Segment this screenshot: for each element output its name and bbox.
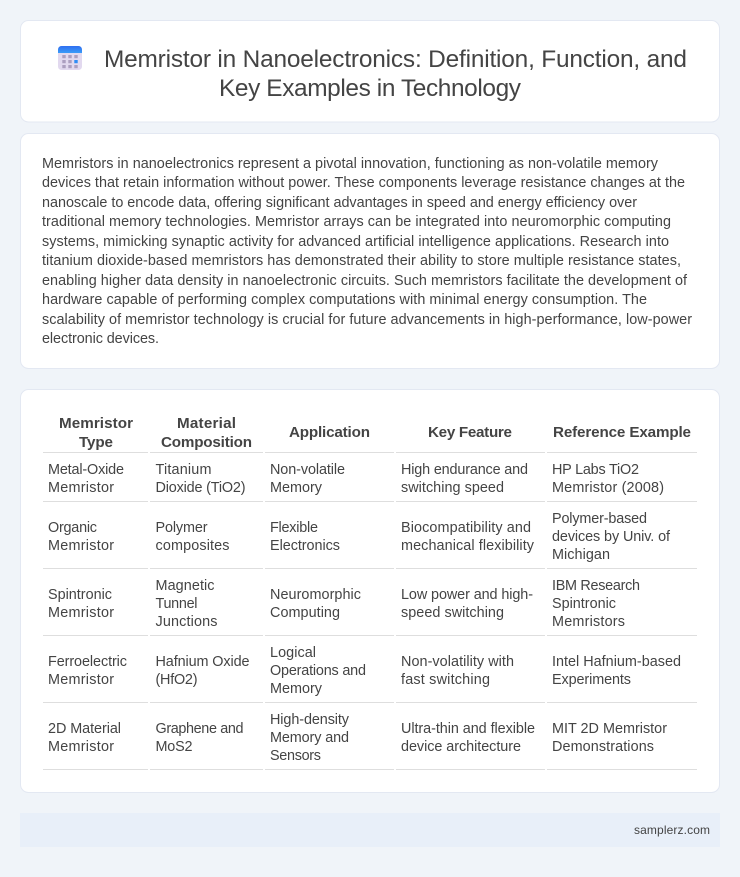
title — [104, 46, 687, 102]
table row: 2D material memristor: High-density — [270, 712, 350, 728]
table row: spintronic memristor: Spintronic — [552, 596, 616, 612]
table row: ferroelectric memristor — [43, 645, 697, 702]
table row: spintronic memristor — [43, 578, 697, 636]
table row: ferroelectric memristor: (HfO2) — [156, 672, 198, 688]
table row: 2D material memristor: Sensors — [270, 748, 321, 764]
table row: spintronic memristor: Computing — [270, 605, 340, 621]
table row: metal-oxide memristor — [43, 462, 697, 502]
table row: organic memristor: Memristor — [48, 538, 114, 554]
table row: metal-oxide memristor: Titanium — [156, 462, 212, 478]
table row: organic memristor: Biocompatibility and — [401, 520, 531, 536]
table row: spintronic memristor: speed switching — [401, 605, 504, 621]
panel: comparison table card — [20, 390, 720, 792]
table row: spintronic memristor: Memristors — [552, 614, 625, 630]
table row: spintronic memristor: Memristor — [48, 605, 114, 621]
table row: ferroelectric memristor: Memristor — [48, 672, 114, 688]
table row: 2D material memristor: Memory and — [270, 730, 349, 746]
table row: ferroelectric memristor: Experiments — [552, 672, 631, 688]
footer bar — [20, 813, 720, 847]
table row: metal-oxide memristor: Dioxide (TiO2) — [156, 480, 246, 496]
table row: organic memristor: devices by Univ. of — [552, 529, 671, 545]
icon: calendar grid — [58, 46, 82, 70]
table row: metal-oxide memristor: Memory — [270, 480, 323, 496]
table row: 2D material memristor: MoS2 — [156, 739, 192, 755]
table row: organic memristor: composites — [156, 538, 230, 554]
table header row — [43, 415, 697, 452]
table row: metal-oxide memristor: High endurance and — [401, 462, 528, 478]
table row: metal-oxide memristor: Memristor (2008) — [552, 480, 664, 496]
table row: ferroelectric memristor: Logical — [270, 645, 316, 661]
panel: description card — [20, 134, 720, 368]
text block: description paragraph: Memristors in nanoelectronics represent a pivotal innovation, functioning as non-volatile memory — [42, 156, 659, 172]
table row: 2D material memristor: device architecture — [401, 739, 521, 755]
table row: organic memristor: Polymer-based — [552, 511, 647, 527]
table header row: Composition — [161, 434, 252, 451]
table row: ferroelectric memristor: Operations and — [270, 663, 366, 679]
table row: organic memristor: Organic — [48, 520, 97, 536]
text block: description paragraph: titanium dioxide-based memristors has demonstrated their ability to store multiple resistance states, — [42, 253, 681, 269]
table row: organic memristor: mechanical flexibility — [401, 538, 535, 554]
text block: description paragraph: electronic devices. — [42, 331, 159, 347]
text block: description paragraph: scalability of memristor technology is crucial for future advancements in high-performance, low-power — [42, 312, 692, 328]
text block: description paragraph: hardware capable of performing complex computations with minimal energy consumption. The — [42, 292, 647, 308]
text block: description paragraph: enabling higher data density in nanoelectronic circuits. Such memristors facilitate the development of — [42, 273, 688, 289]
table row: spintronic memristor: IBM Research — [552, 578, 640, 594]
table row: 2D material memristor: Ultra-thin and flexible — [401, 721, 535, 737]
table row: metal-oxide memristor: Metal-Oxide — [48, 462, 124, 478]
table row: ferroelectric memristor: Hafnium Oxide — [156, 654, 250, 670]
table header row: Reference Example — [553, 424, 691, 441]
table header row: Material — [177, 415, 236, 432]
title: Memristor in Nanoelectronics: Definition, Function, and — [104, 46, 687, 73]
table row: 2D material memristor: Graphene and — [156, 721, 244, 737]
table row: 2D material memristor: 2D Material — [48, 721, 121, 737]
text block: description paragraph: nanoscale to encode data, offering significant advantages in speed and energy efficiency over — [42, 195, 637, 211]
table row: metal-oxide memristor: switching speed — [401, 480, 504, 496]
table row: spintronic memristor: Neuromorphic — [270, 587, 361, 603]
table row: spintronic memristor: Junctions — [156, 614, 218, 630]
table row: organic memristor — [43, 511, 697, 568]
table row: 2D material memristor: Memristor — [48, 739, 114, 755]
table row: organic memristor: Flexible — [270, 520, 318, 536]
table row: organic memristor: Polymer — [156, 520, 208, 536]
table row: 2D material memristor: Demonstrations — [552, 739, 654, 755]
text block: description paragraph: devices that retain information without power. These components leverage resistance changes at the — [42, 175, 685, 191]
table row: metal-oxide memristor: Memristor — [48, 480, 114, 496]
table header row: Application — [289, 424, 370, 441]
table row: ferroelectric memristor: Intel Hafnium-based — [552, 654, 681, 670]
table row: ferroelectric memristor: fast switching — [401, 672, 490, 688]
table row: spintronic memristor: Magnetic — [156, 578, 214, 594]
table row: ferroelectric memristor: Ferroelectric — [48, 654, 127, 670]
table row: spintronic memristor: Tunnel — [156, 596, 198, 612]
table row: organic memristor: Electronics — [270, 538, 340, 554]
text block: description paragraph — [42, 156, 692, 347]
table row: 2D material memristor: MIT 2D Memristor — [552, 721, 667, 737]
text block: description paragraph: traditional memory technologies. Memristor arrays can be integrated into neuromorphic computing — [42, 214, 671, 230]
table row: ferroelectric memristor: Memory — [270, 681, 323, 697]
table row: metal-oxide memristor: HP Labs TiO2 — [552, 462, 639, 478]
title: Key Examples in Technology — [219, 75, 522, 102]
text block: description paragraph: systems, mimicking synaptic activity for advanced artificial intelligence applications. Research into — [42, 234, 669, 250]
table row: metal-oxide memristor: Non-volatile — [270, 462, 345, 478]
footer bar: samplerz.com — [634, 823, 710, 837]
table row: spintronic memristor: Spintronic — [48, 587, 112, 603]
table header row: Memristor — [59, 415, 133, 432]
table row: spintronic memristor: Low power and high- — [401, 587, 533, 603]
table row: ferroelectric memristor: Non-volatility with — [401, 654, 514, 670]
table row: organic memristor: Michigan — [552, 547, 610, 563]
panel: title card — [20, 20, 720, 122]
table header row: Type — [79, 434, 113, 451]
table header row: Key Feature — [428, 424, 512, 441]
table row: 2D material memristor — [43, 712, 697, 770]
